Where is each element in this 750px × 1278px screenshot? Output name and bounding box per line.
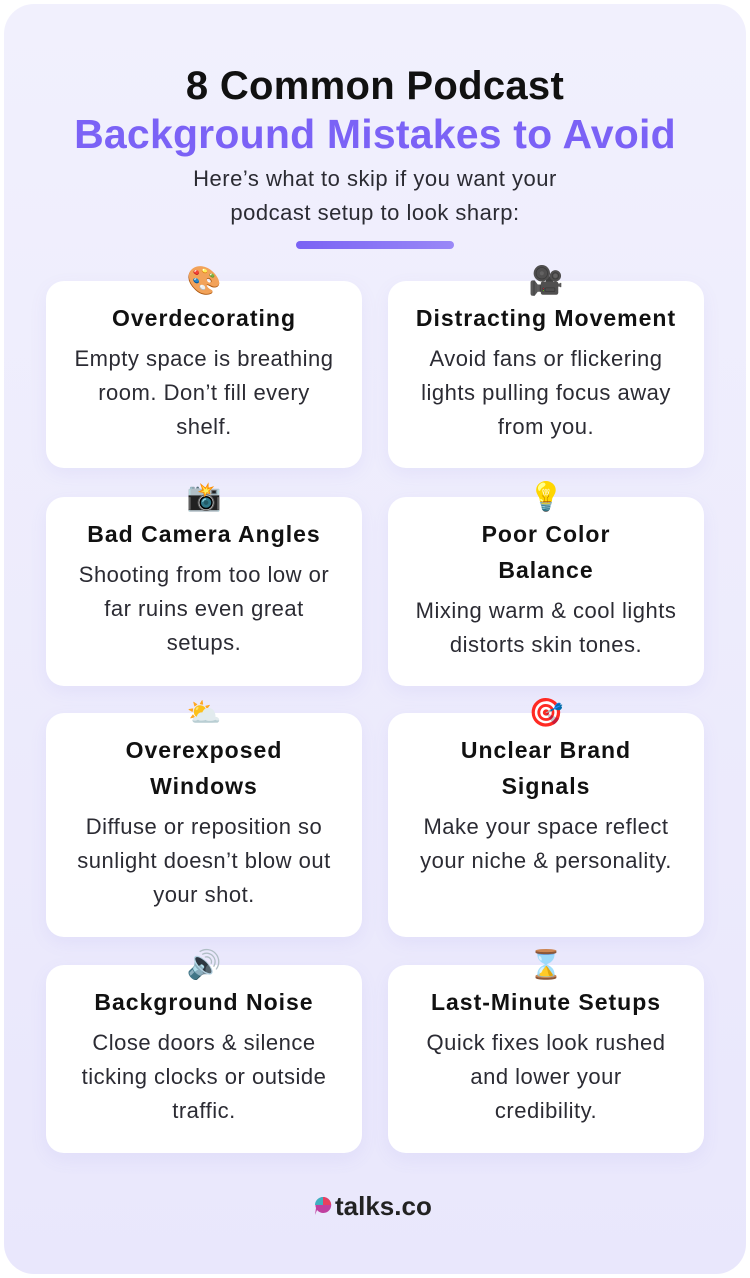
card: Overdecorating: room. Don’t fill every: [98, 380, 310, 405]
title line 1: 8 Common Podcast: [186, 64, 564, 108]
card: Bad Camera Angles: Bad Camera Angles: [87, 521, 321, 547]
card: Background Noise: Close doors & silence: [92, 1030, 316, 1055]
card: Background Noise: traffic.: [172, 1098, 236, 1123]
card: Poor Color Balance: [388, 497, 704, 686]
card: Distracting Movement: lights pulling focus away: [421, 380, 671, 405]
icon: hourglass: ⌛: [529, 948, 563, 981]
logo: talks.co: talks.co: [335, 1190, 432, 1220]
card: Last-Minute Setups: Last-Minute Setups: [431, 989, 661, 1015]
card: Unclear Brand Signals: Make your space reflect: [423, 814, 669, 839]
icon: light bulb: 💡: [529, 480, 563, 513]
icon: speaker: 🔊: [187, 948, 221, 981]
card: Last-Minute Setups: Quick fixes look rushed: [427, 1030, 665, 1055]
card: Poor Color Balance: Mixing warm & cool lights: [416, 598, 676, 623]
card: Overexposed Windows: [46, 713, 362, 937]
card: Background Noise: [46, 965, 362, 1153]
card: Overexposed Windows: Diffuse or reposition so: [86, 814, 322, 839]
card: Last-Minute Setups: and lower your: [470, 1064, 622, 1089]
accent bar: [296, 241, 454, 249]
card: Overdecorating: shelf.: [176, 414, 232, 439]
card: Bad Camera Angles: Shooting from too low or: [79, 562, 329, 587]
subtitle: Here’s what to skip if you want your: [193, 166, 557, 191]
card: Poor Color Balance: Balance: [498, 557, 594, 583]
subtitle: [193, 166, 557, 225]
card: Background Noise: Background Noise: [94, 989, 314, 1015]
title line 2: Background Mistakes to Avoid: [74, 111, 676, 157]
card: Distracting Movement: Distracting Movement: [416, 305, 676, 331]
card: Overdecorating: Empty space is breathing: [74, 346, 334, 371]
card: Overexposed Windows: Overexposed: [126, 737, 282, 763]
card: Overdecorating: Overdecorating: [112, 305, 296, 331]
card: Background Noise: ticking clocks or outside: [82, 1064, 326, 1089]
card: Overexposed Windows: sunlight doesn’t blow out: [77, 848, 331, 873]
card: Distracting Movement: [388, 281, 704, 468]
card: Bad Camera Angles: [46, 497, 362, 686]
card: Distracting Movement: from you.: [498, 414, 594, 439]
card: Poor Color Balance: distorts skin tones.: [450, 632, 642, 657]
card: Bad Camera Angles: setups.: [167, 630, 241, 655]
card: Distracting Movement: Avoid fans or flickering: [430, 346, 662, 371]
icon: sun cloud: ⛅: [187, 696, 221, 729]
card: Unclear Brand Signals: your niche & personality.: [420, 848, 672, 873]
icon: target: 🎯: [529, 696, 563, 729]
card: Unclear Brand Signals: Unclear Brand: [461, 737, 631, 763]
card: Overexposed Windows: Windows: [150, 773, 258, 799]
icon: camera flash: 📸: [187, 480, 221, 513]
icon: palette: 🎨: [187, 264, 221, 297]
card: Overdecorating: [46, 281, 362, 468]
card: Overexposed Windows: your shot.: [153, 882, 255, 907]
card: Bad Camera Angles: far ruins even great: [104, 596, 304, 621]
card: Poor Color Balance: Poor Color: [482, 521, 610, 547]
card: Unclear Brand Signals: [388, 713, 704, 937]
subtitle: podcast setup to look sharp:: [230, 200, 520, 225]
card: Unclear Brand Signals: Signals: [502, 773, 590, 799]
icon: movie camera: 🎥: [529, 264, 563, 297]
card: Last-Minute Setups: [388, 965, 704, 1153]
card: Last-Minute Setups: credibility.: [495, 1098, 597, 1123]
